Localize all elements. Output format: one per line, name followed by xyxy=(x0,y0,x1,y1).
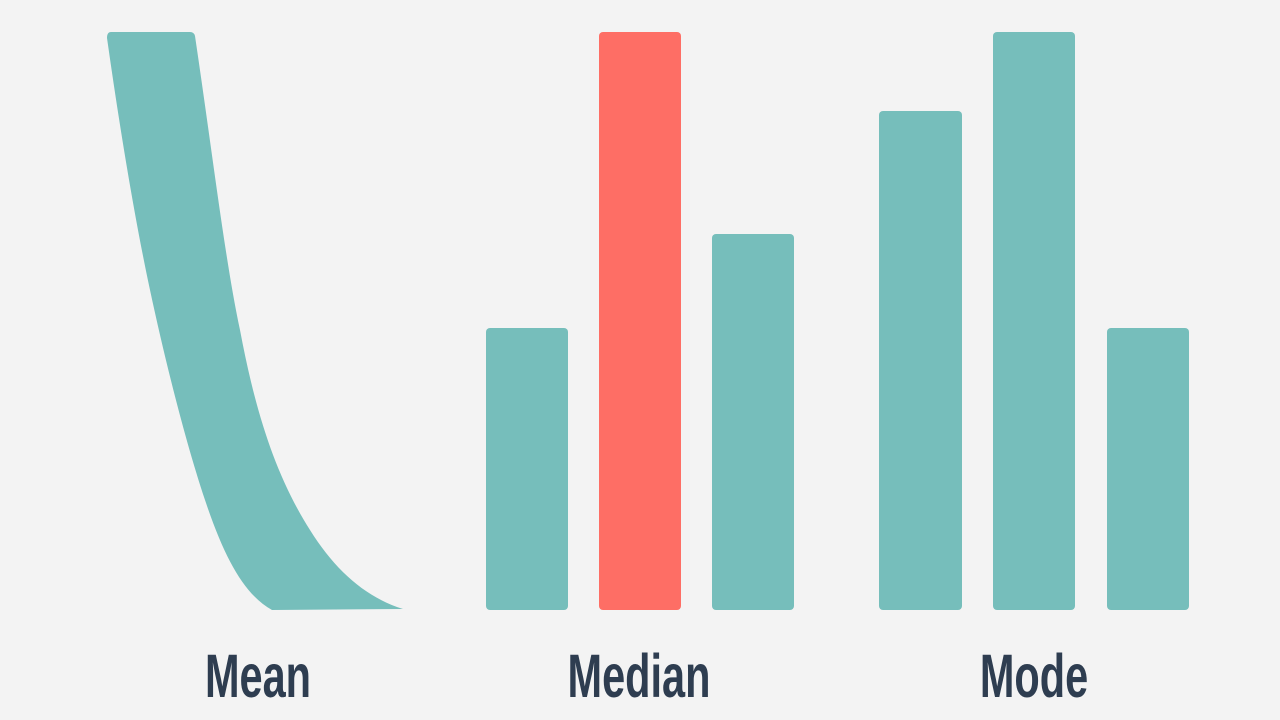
mode bars xyxy=(879,32,1189,610)
label: Mean: Mean xyxy=(205,642,311,710)
label: Median: Median xyxy=(568,642,710,710)
median bars xyxy=(486,32,794,610)
label: Mode: Mode xyxy=(980,642,1088,710)
mean curve shape xyxy=(107,32,403,610)
